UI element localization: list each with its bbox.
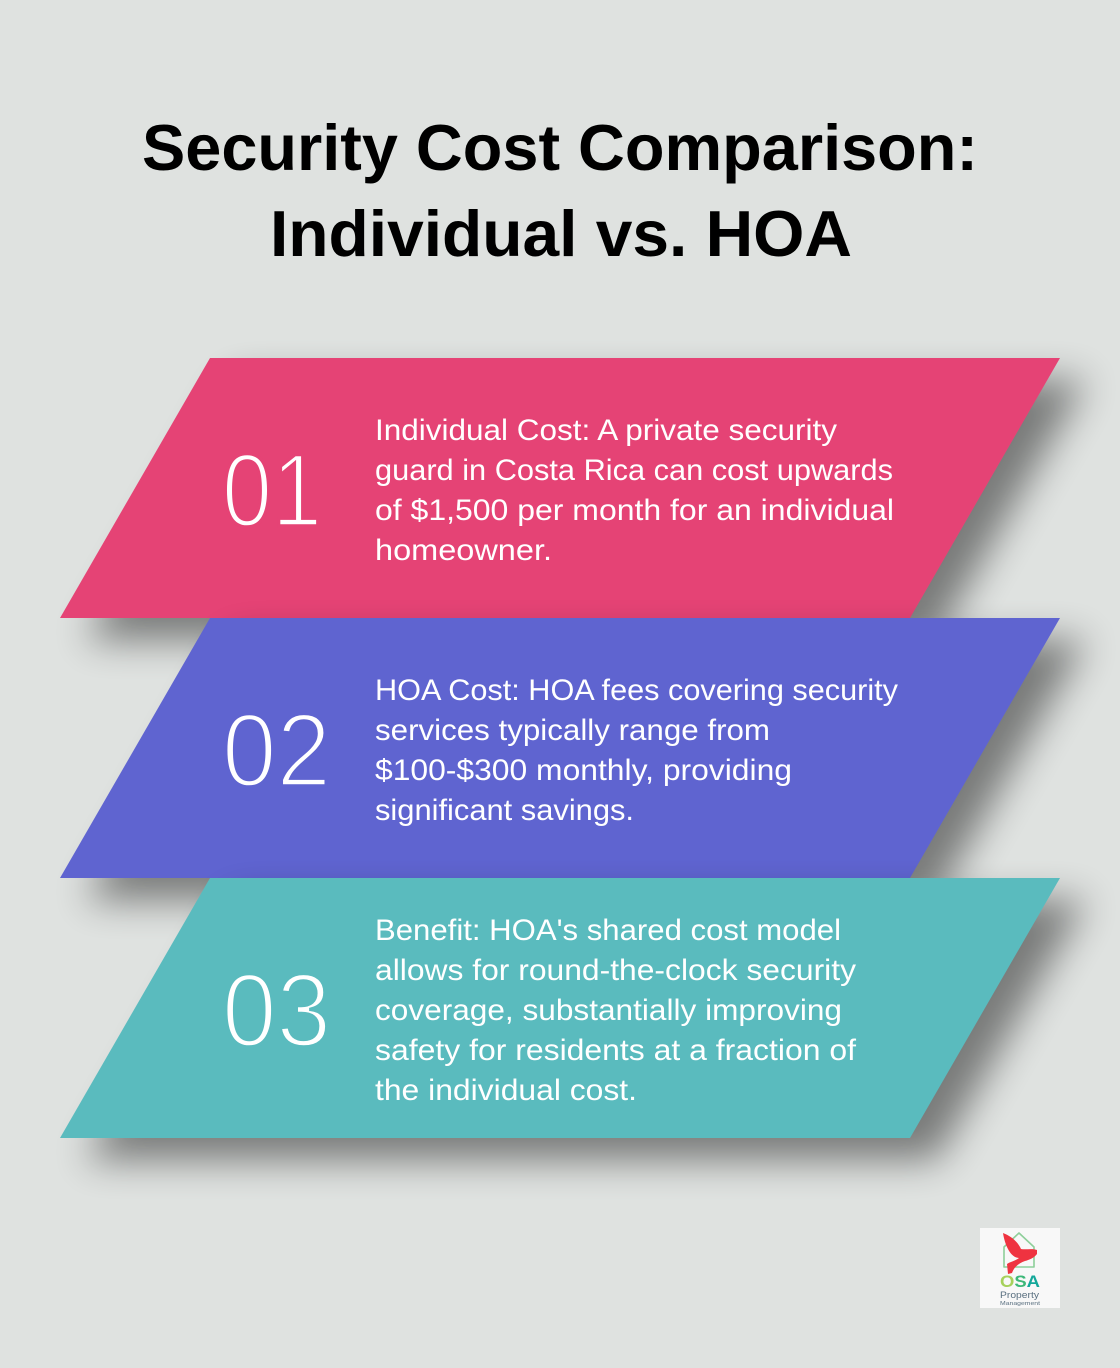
text: benefit: allows for round-the-clock security bbox=[375, 954, 856, 987]
text: individual cost: of $1,500 per month for an individual bbox=[375, 494, 894, 527]
logo wordmark: OSA bbox=[1000, 1272, 1040, 1291]
text: benefit: Benefit: HOA's shared cost model bbox=[375, 914, 841, 947]
title: Individual vs. HOA bbox=[270, 197, 852, 270]
number 03: 03 bbox=[222, 953, 331, 1069]
panel shape: indigo parallelogram bbox=[60, 618, 1060, 878]
panel shape: pink parallelogram bbox=[60, 358, 1060, 618]
text: HOA cost: $100-$300 monthly, providing bbox=[375, 754, 792, 787]
text: benefit: safety for residents at a fraction of bbox=[375, 1034, 857, 1067]
text: HOA cost bbox=[375, 674, 898, 827]
title bbox=[142, 111, 978, 270]
text: individual cost: Individual Cost: A private security bbox=[375, 414, 837, 447]
panel: HOA cost bbox=[60, 618, 1060, 878]
logo subtitle second line: Management bbox=[1000, 1301, 1041, 1307]
panel shape: teal parallelogram bbox=[60, 878, 1060, 1138]
text: individual cost bbox=[375, 414, 894, 567]
logo subtitle: Property bbox=[1000, 1290, 1039, 1301]
icon: red bird bbox=[1003, 1233, 1037, 1274]
title: Security Cost Comparison: bbox=[142, 111, 978, 184]
text: benefit: coverage, substantially improving bbox=[375, 994, 842, 1027]
text: HOA cost: services typically range from bbox=[375, 714, 770, 747]
panel: individual cost bbox=[60, 358, 1060, 618]
text: HOA cost: significant savings. bbox=[375, 794, 634, 827]
icon: house outline bbox=[1004, 1233, 1034, 1267]
text: benefit: the individual cost. bbox=[375, 1074, 637, 1107]
number 02: 02 bbox=[222, 693, 331, 809]
text: HOA cost: HOA Cost: HOA fees covering security bbox=[375, 674, 898, 707]
text: benefit bbox=[375, 914, 857, 1107]
number 01: 01 bbox=[222, 433, 322, 549]
text: individual cost: homeowner. bbox=[375, 534, 552, 567]
panel: benefit bbox=[60, 878, 1060, 1138]
logo: OSA Property Management bbox=[980, 1228, 1060, 1308]
text: individual cost: guard in Costa Rica can cost upwards bbox=[375, 454, 893, 487]
